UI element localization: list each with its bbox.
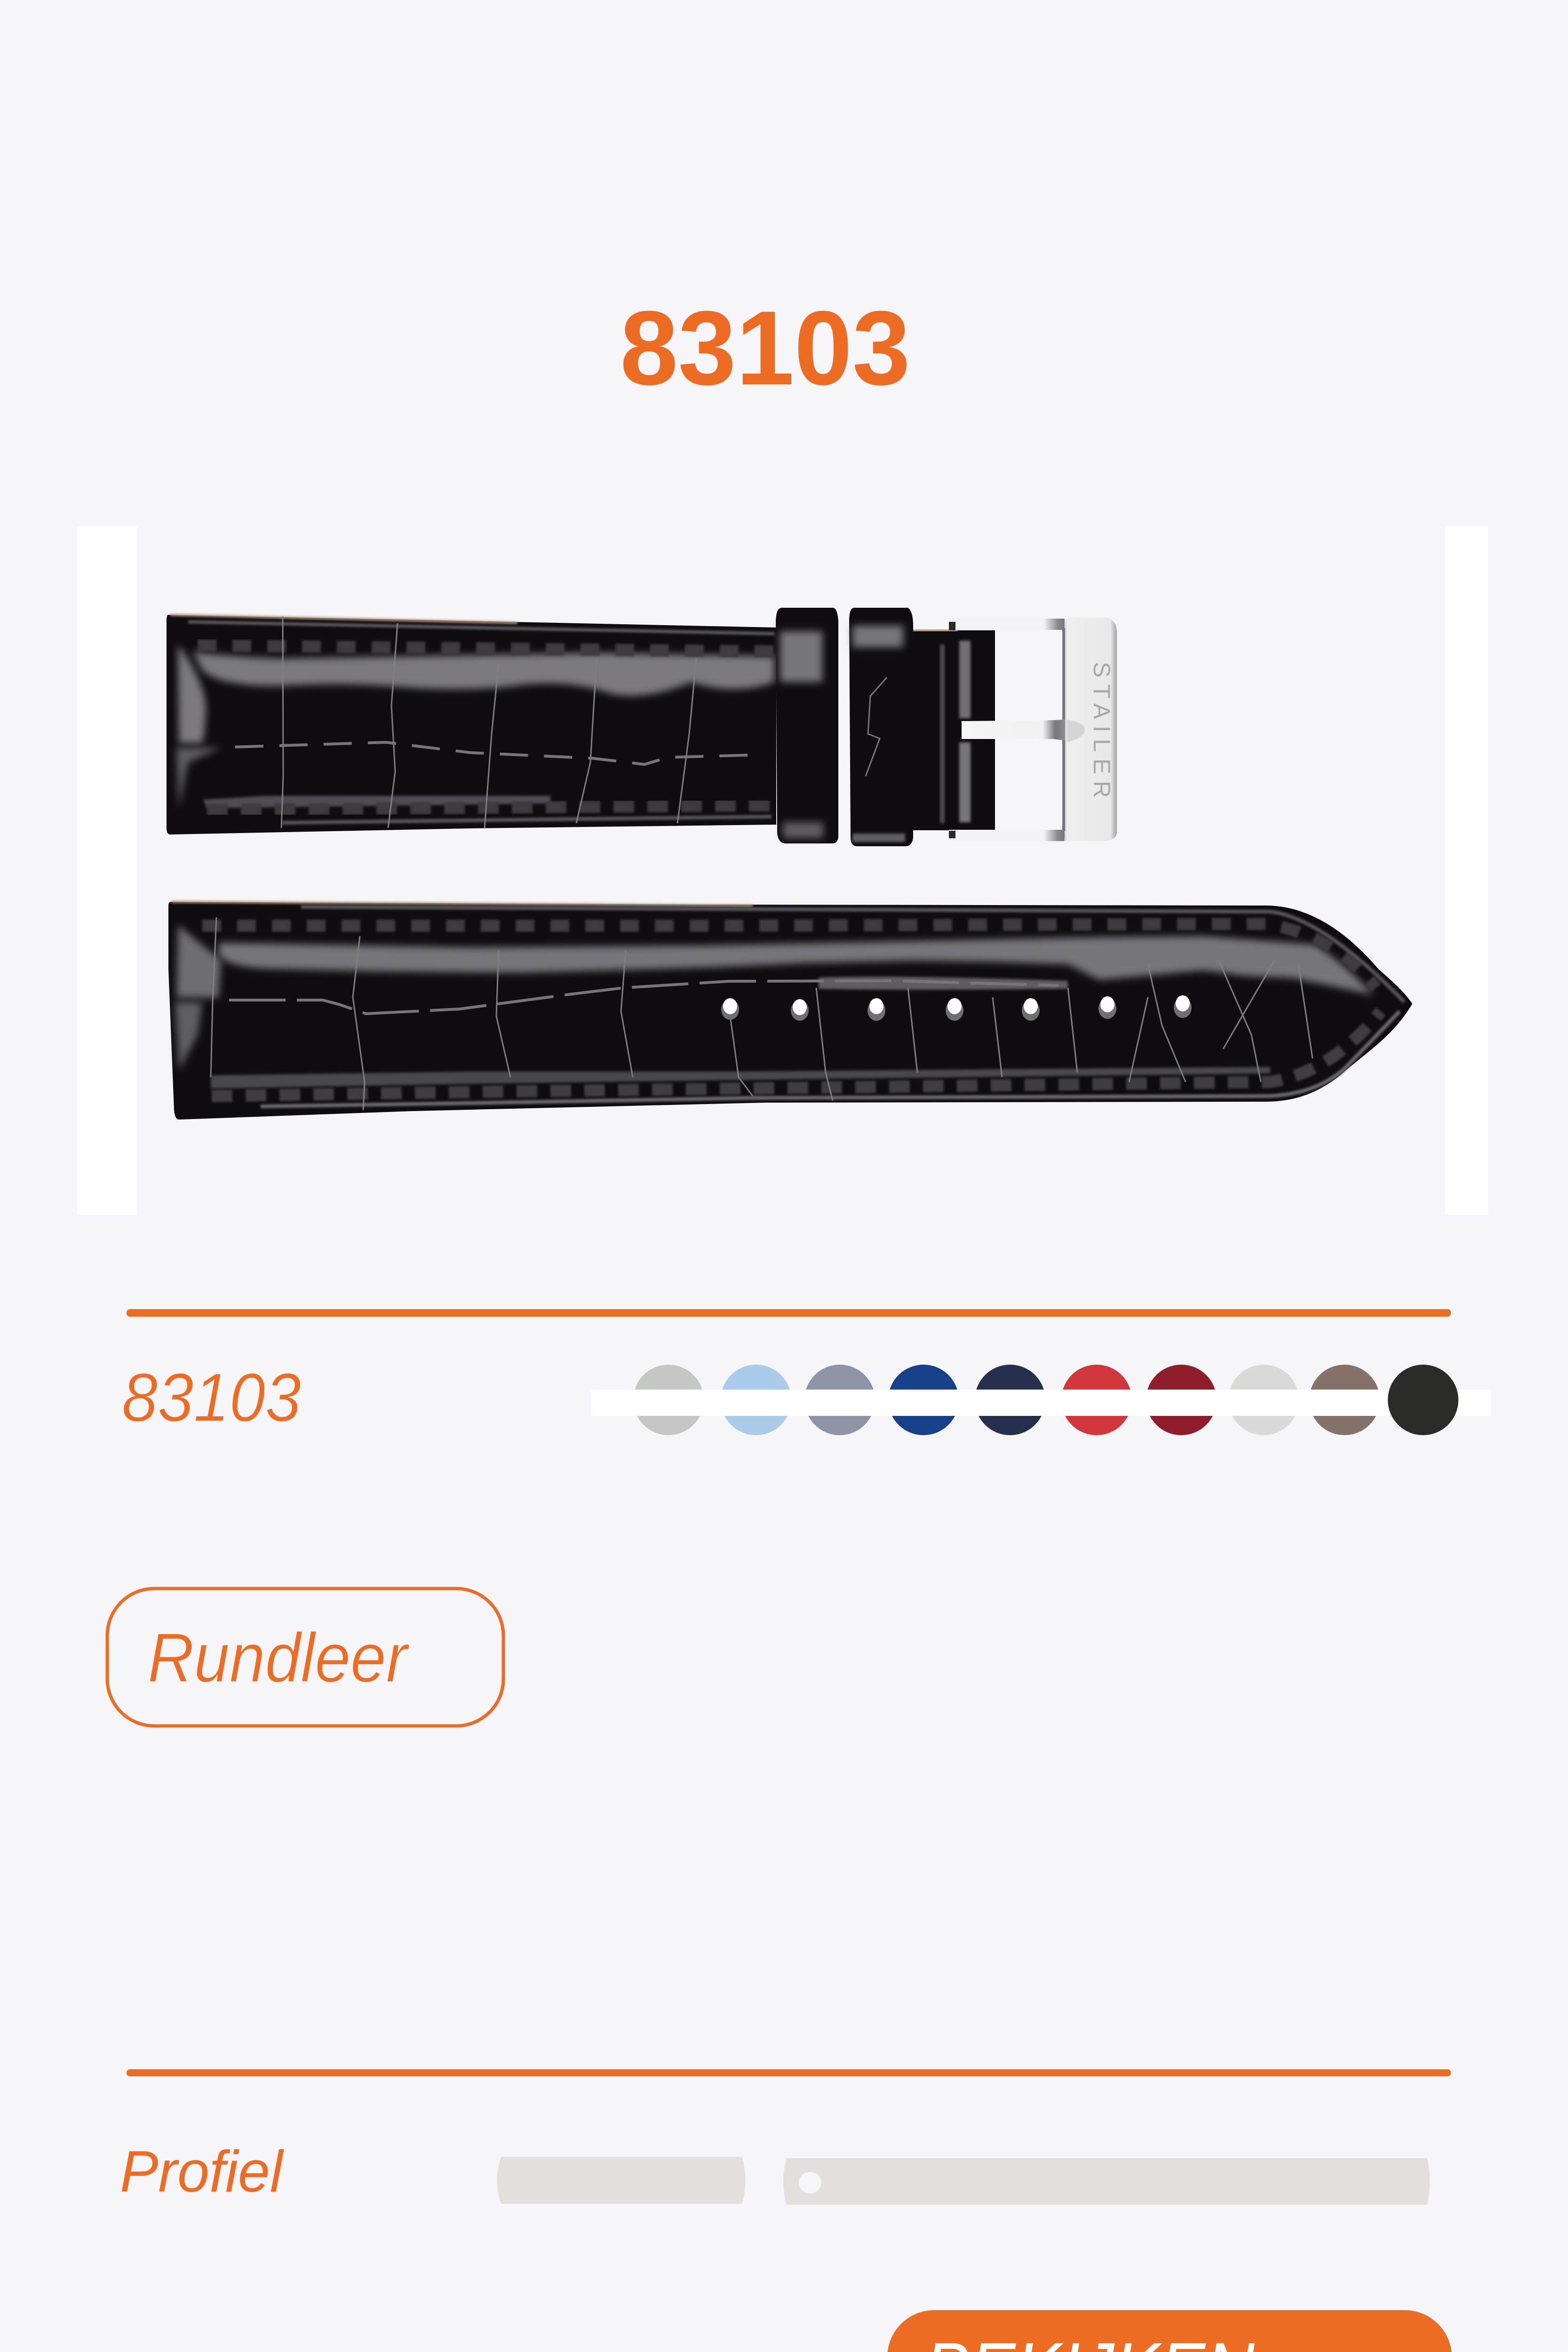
buckle pin [962,719,1085,742]
button [887,2310,1452,2352]
cracks [211,917,1313,1110]
buckle frame [949,619,1066,841]
material tag [107,1589,503,1726]
panel: white side bars [77,526,1488,1215]
title: 83103 [620,289,910,407]
divider: bottom rule [127,2069,1451,2076]
buckle side profile [497,2157,745,2204]
image: short watch strap with buckle [167,608,1117,846]
cracks [235,616,753,828]
gloss band [193,652,774,696]
stitching [198,645,774,652]
swatch circles [633,1365,1380,1435]
profile diagram [497,2157,1430,2205]
white band [591,1390,1491,1416]
image: long watch strap with holes [168,902,1412,1120]
material tag: Rundleer [148,1619,410,1697]
stitching [202,924,1376,988]
selected swatch [1388,1365,1458,1435]
gloss band [219,936,1374,995]
strap side profile [783,2158,1430,2205]
divider: top rule [127,1309,1451,1317]
strap keepers [776,608,913,846]
buckle tail [913,630,995,830]
profile hole [799,2172,821,2193]
buckle plate with brand [1064,618,1117,841]
buckle plate with brand: STAILER [1089,662,1115,798]
model number: 83103 [122,1359,301,1436]
colour swatches [591,1365,1491,1435]
strap body [167,615,776,834]
profile label: Profiel [120,2139,284,2204]
strap holes [721,995,1192,1021]
